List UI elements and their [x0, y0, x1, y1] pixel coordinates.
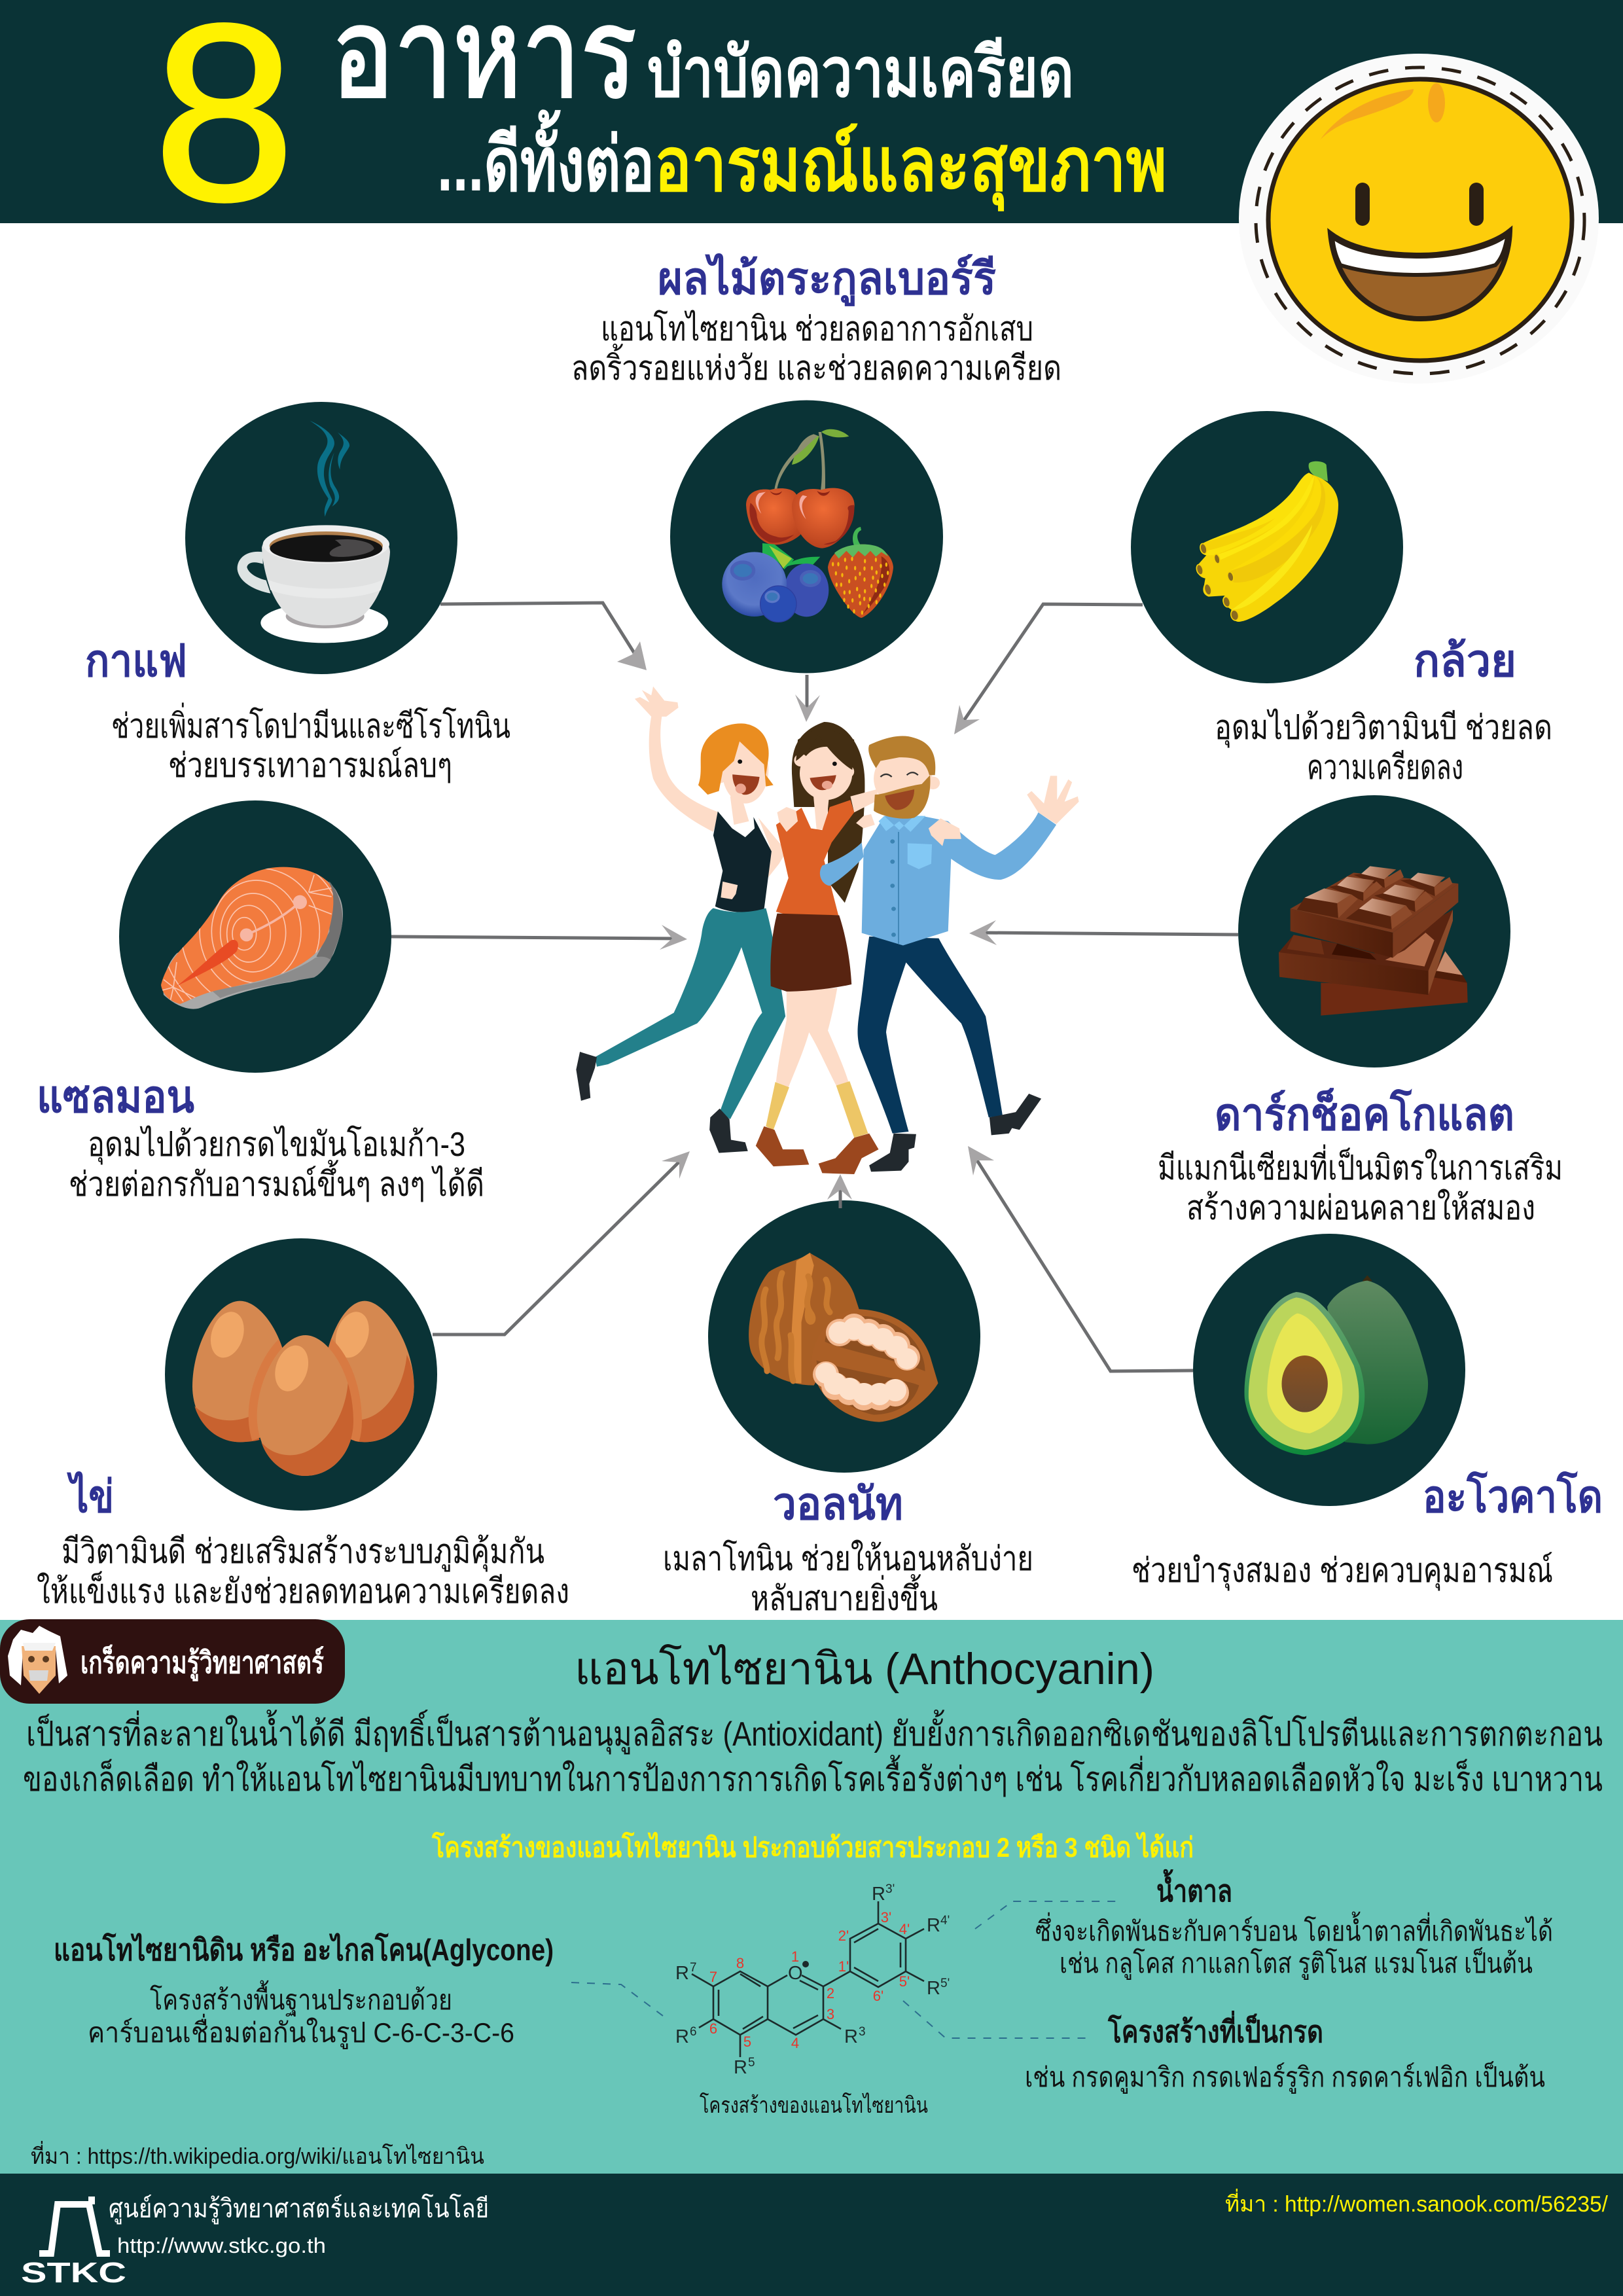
illustration: three happy friends: [576, 687, 1079, 1174]
chart: molecular structure of anthocyanin: 3: [827, 2006, 834, 2022]
circle: berries: [670, 401, 943, 673]
icon: banana: [1196, 461, 1338, 622]
title: [153, 0, 1167, 253]
text: aglycone: [54, 1932, 554, 2049]
chart: molecular structure of anthocyanin: 8: [736, 1955, 744, 1971]
chart: molecular structure of anthocyanin: 1': [838, 1958, 849, 1975]
icon: walnut: [749, 1253, 938, 1422]
text: aglycone: แอนโทไซยานิดิน หรือ อะไกลโคน(Aglycone): [54, 1932, 554, 1967]
panel: coffee: [85, 402, 510, 785]
chart: molecular structure of anthocyanin: 6: [709, 2020, 717, 2037]
heading: banana: กล้วย: [1414, 636, 1516, 686]
chart: molecular structure of anthocyanin: 5': [940, 1977, 950, 1990]
footer band: [0, 2174, 1623, 2296]
circle: banana: [1131, 411, 1403, 683]
heading: salmon: แซลมอน: [37, 1072, 194, 1122]
text: chocolate description: สร้างความผ่อนคลายให้สมอง: [1186, 1189, 1535, 1227]
circle: eggs: [165, 1238, 437, 1511]
heading: anthocyanin: แอนโทไซยานิน (Anthocyanin): [575, 1643, 1154, 1694]
text: acid structure: [1025, 2011, 1545, 2094]
middle woman: [756, 722, 879, 1174]
chart: molecular structure of anthocyanin: 3': [885, 1882, 895, 1896]
arrow: avocado: [968, 1146, 1193, 1371]
text: banana description: [1215, 708, 1552, 787]
text: salmon description: ช่วยต่อกรกับอารมณ์ขึ้นๆ ลงๆ ได้ดี: [69, 1160, 484, 1204]
circle: salmon: [119, 800, 391, 1073]
chart: molecular structure of anthocyanin: R: [872, 1884, 885, 1905]
title: บำบัดความเครียด: [647, 35, 1074, 111]
chart: molecular structure of anthocyanin: O: [788, 1963, 803, 1984]
arrow: salmon: [391, 925, 687, 950]
panel: walnut: [663, 1200, 1033, 1618]
circle: chocolate: [1238, 795, 1510, 1067]
text: coffee description: ช่วยบรรเทาอารมณ์ลบๆ: [168, 747, 452, 785]
chart: molecular structure of anthocyanin: R: [927, 1915, 940, 1936]
text: walnut description: หลับสบายยิ่งขึ้น: [751, 1574, 938, 1618]
icon: berries: [722, 429, 893, 622]
text: banana description: อุดมไปด้วยวิตามินบี ช่วยลด: [1215, 708, 1552, 748]
text: acid structure: เช่น กรดคูมาริก กรดเฟอร์รูริก กรดคาร์เฟอิก เป็นต้น: [1025, 2061, 1545, 2094]
circle: avocado: [1193, 1234, 1465, 1506]
chart: molecular structure of anthocyanin: 3': [881, 1909, 891, 1926]
icon: avocado: [1244, 1275, 1428, 1455]
chart: molecular structure of anthocyanin: R: [675, 2026, 689, 2047]
text: sugar: เช่น กลูโคส กาแลกโตส รูติโนส แรมโนส เป็นต้น: [1060, 1947, 1533, 1980]
icon: coffee cup: [238, 421, 390, 643]
icon: chocolate bars: [1279, 866, 1468, 1016]
chart: molecular structure of anthocyanin: 7: [709, 1969, 717, 1985]
logo: STKC: [21, 2197, 126, 2289]
arrow: eggs: [433, 1151, 690, 1335]
chart: molecular structure of anthocyanin: 5: [743, 2034, 751, 2050]
leader lines: [571, 1901, 1120, 2038]
chart: molecular structure of anthocyanin: 4: [791, 2035, 799, 2051]
text: berries description: แอนโทไซยานิน ช่วยลดอาการอักเสบ: [601, 310, 1033, 348]
panel: salmon: [37, 800, 484, 1204]
icon: Einstein: [8, 1626, 67, 1694]
icon: salmon steak: [161, 867, 343, 1009]
text: salmon description: อุดมไปด้วยกรดไขมันโอเมก้า-3: [88, 1125, 465, 1165]
text: sugar: [1035, 1869, 1553, 1980]
chart: molecular structure of anthocyanin: 3: [859, 2025, 866, 2039]
chart: molecular structure of anthocyanin: 6: [690, 2025, 697, 2039]
chart: molecular structure of anthocyanin: 6': [873, 1988, 883, 2004]
text: coffee description: [111, 702, 510, 785]
heading: coffee: กาแฟ: [85, 636, 187, 686]
chart: molecular structure of anthocyanin: R: [675, 1963, 689, 1984]
title: ...ดีทั้งต่อ: [437, 109, 654, 207]
source: sanook: ที่มา : http://women.sanook.com/56235/: [1225, 2189, 1609, 2217]
text: chocolate description: [1158, 1144, 1563, 1227]
chart: molecular structure of anthocyanin: 4': [899, 1921, 910, 1937]
arrow: banana: [954, 604, 1143, 734]
man: [820, 736, 1079, 1172]
chart: molecular structure of anthocyanin: R: [844, 2026, 858, 2047]
chart: molecular structure of anthocyanin: 5: [748, 2056, 755, 2070]
circle: walnut: [708, 1200, 980, 1473]
heading: eggs: ไข่: [67, 1471, 114, 1522]
text: salmon description: [69, 1125, 484, 1204]
panel: berries: [571, 253, 1061, 673]
text: walnut description: เมลาโทนิน ช่วยให้นอนหลับง่าย: [663, 1539, 1033, 1578]
chart: molecular structure of anthocyanin: R: [927, 1978, 940, 1999]
panel: science knowledge: [0, 1619, 1623, 2174]
source: wikipedia: ที่มา : https://th.wikipedia.org/wiki/แอนโทไซยานิน: [31, 2141, 484, 2169]
chart: molecular structure of anthocyanin: 5': [899, 1973, 910, 1990]
chart: molecular structure of anthocyanin: R: [734, 2057, 747, 2078]
text: sugar: น้ำตาล: [1156, 1869, 1232, 1908]
text: aglycone: คาร์บอนเชื่อมต่อกันในรูป C-6-C-3-C-6: [88, 2014, 514, 2049]
chart: molecular structure of anthocyanin: [675, 1882, 950, 2078]
header band: [0, 0, 1623, 223]
title: อารมณ์และสุขภาพ: [654, 123, 1167, 211]
heading: walnut: วอลนัท: [773, 1479, 903, 1529]
subheading: composition: โครงสร้างของแอนโทไซยานิน ประกอบด้วยสารประกอบ 2 หรือ 3 ชนิด ได้แก่: [431, 1831, 1194, 1863]
text: eggs description: มีวิตามินดี ช่วยเสริมสร้างระบบภูมิคุ้มกัน: [62, 1533, 544, 1572]
chart: molecular structure of anthocyanin: 2: [827, 1985, 834, 2001]
text: organisation: [109, 2194, 489, 2257]
chart: molecular structure of anthocyanin: 7: [690, 1961, 697, 1975]
circle: coffee: [185, 402, 457, 674]
logo: STKC: STKC: [21, 2257, 126, 2289]
arrow: walnut: [827, 1174, 852, 1208]
text: organisation: http://www.stkc.go.th: [117, 2234, 326, 2257]
text: banana description: ความเครียดลง: [1307, 749, 1463, 787]
chart: molecular structure of anthocyanin: 4': [940, 1914, 950, 1928]
arrow: berries: [795, 675, 820, 722]
text: walnut description: [663, 1539, 1033, 1618]
arrow: chocolate: [969, 920, 1238, 945]
panel: dark chocolate: [1158, 795, 1563, 1227]
left woman: [576, 687, 787, 1153]
chart: molecular structure of anthocyanin: 2': [838, 1928, 849, 1944]
icon: smiley face: [1239, 54, 1599, 384]
panel: banana: [1131, 411, 1552, 787]
chart: molecular structure of anthocyanin: 1: [791, 1948, 799, 1965]
text: anthocyanin description: [23, 1710, 1603, 1799]
text: eggs description: ให้แข็งแรง และยังช่วยลดทอนความเครียดลง: [37, 1571, 569, 1611]
text: berries description: ลดริ้วรอยแห่งวัย และช่วยลดความเครียด: [571, 344, 1061, 387]
panel: avocado: [1132, 1234, 1603, 1591]
badge: science tips: [0, 1619, 345, 1704]
heading: berries: ผลไม้ตระกูลเบอร์รี: [658, 253, 996, 307]
caption: molecular structure: โครงสร้างของแอนโทไซยานิน: [700, 2092, 928, 2118]
panel background: [0, 1620, 1623, 2174]
panel: eggs: [37, 1238, 569, 1611]
text: aglycone: โครงสร้างพื้นฐานประกอบด้วย: [150, 1980, 452, 2017]
arrow: coffee: [440, 603, 647, 670]
text: coffee description: ช่วยเพิ่มสารโดปามีนและซีโรโทนิน: [111, 702, 510, 745]
text: eggs description: [37, 1533, 569, 1611]
heading: dark chocolate: ดาร์กช็อคโกแลต: [1215, 1088, 1514, 1139]
text: acid structure: โครงสร้างที่เป็นกรด: [1107, 2011, 1323, 2049]
footer: [0, 2174, 1623, 2296]
badge label: เกร็ดความรู้วิทยาศาสตร์: [80, 1644, 324, 1681]
text: berries description: [571, 310, 1061, 387]
icon: eggs: [192, 1301, 414, 1476]
text: organisation: ศูนย์ความรู้วิทยาศาสตร์และเทคโนโลยี: [109, 2194, 489, 2224]
